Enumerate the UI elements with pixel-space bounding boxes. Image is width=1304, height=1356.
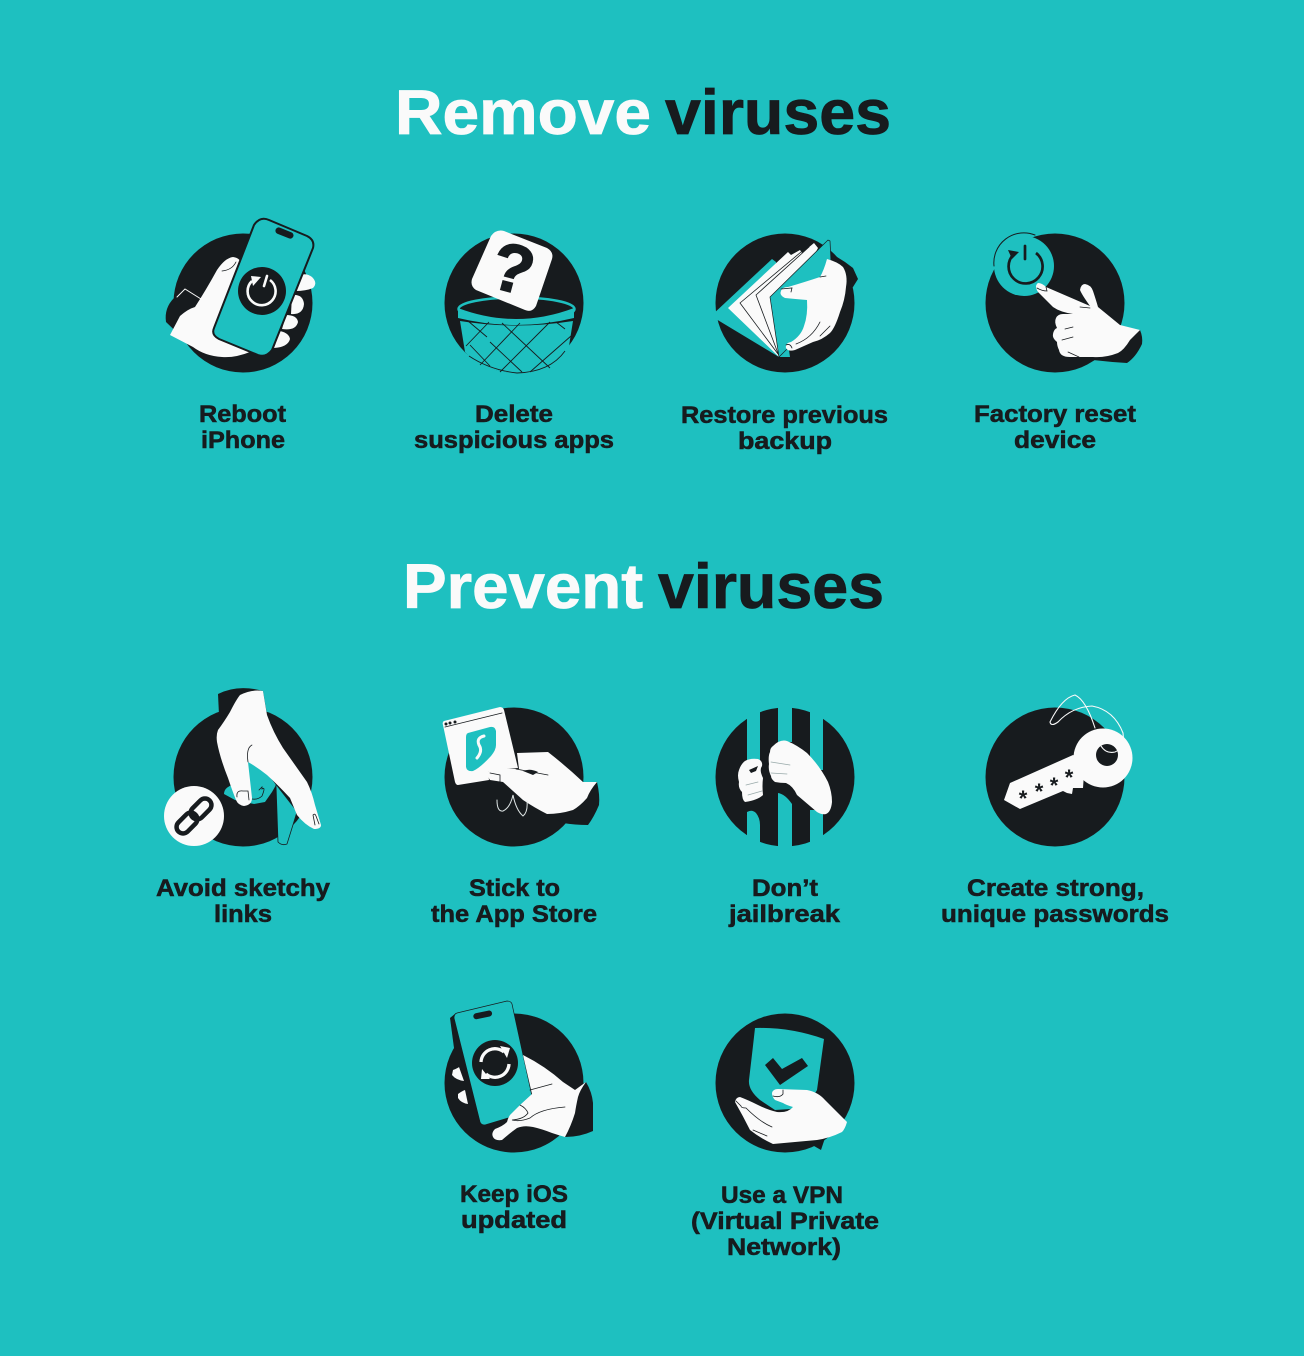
icon: question card dropping into basket: ? [483,227,543,311]
icon: hand holding App Store card [443,707,599,846]
label: Reboot iPhone: iPhone [201,427,285,454]
label: Reboot iPhone: Reboot [199,401,286,428]
panel: avoid sketchy links [156,688,331,928]
label: Avoid sketchy links: Avoid sketchy [156,875,331,902]
label: Factory reset device: device [1014,427,1096,454]
icon: key with hidden password [986,695,1132,846]
label: Keep iOS updated: updated [461,1207,567,1234]
label: Restore previous backup [681,402,888,455]
icon: key with hidden password: * [1019,786,1028,811]
panel: don't jailbreak [716,700,854,928]
label: Create strong, unique passwords: Create strong, [967,875,1144,902]
icon: hand holding phone with update arrows [444,1001,593,1152]
label: Create strong, unique passwords [941,875,1169,928]
label: Reboot iPhone [199,401,286,454]
label: Use a VPN (Virtual Private Network): Use a VPN [721,1182,843,1209]
label: Restore previous backup: backup [738,428,832,455]
label: Stick to the App Store: the App Store [431,901,597,928]
icon: key with hidden password: * [1050,773,1059,798]
label: Don't jailbreak [728,875,841,928]
heading: Remove viruses [395,78,891,148]
icon: hand holding VPN shield [716,1014,854,1152]
label: Delete suspicious apps: Delete [475,401,553,428]
heading: Remove viruses: Remove [395,78,651,148]
heading: Prevent viruses [403,552,884,622]
icon: fingers walking to a chain link [164,688,321,846]
label: Use a VPN (Virtual Private Network): (Virtual Private [691,1208,879,1235]
icon: hands gripping jail bars [716,700,854,853]
panel: create strong, unique passwords [941,695,1169,928]
icon: key with hidden password: * [1065,765,1074,790]
icon: key with hidden password: * [1035,779,1044,804]
label: Stick to the App Store: Stick to [469,875,560,902]
label: Delete suspicious apps: suspicious apps [414,427,614,454]
label: Restore previous backup: Restore previous [681,402,888,429]
panel: stick to the App Store [431,707,599,928]
label: Use a VPN (Virtual Private Network): Network) [727,1234,841,1261]
label: Avoid sketchy links [156,875,331,928]
label: Keep iOS updated [460,1181,568,1234]
label: Delete suspicious apps [414,401,614,454]
label: Don't jailbreak: jailbreak [728,901,841,928]
label: Use a VPN (Virtual Private Network) [691,1182,879,1261]
label: Factory reset device: Factory reset [974,401,1136,428]
label: Keep iOS updated: Keep iOS [460,1181,568,1208]
panel: keep iOS updated [444,1001,593,1234]
label: Don't jailbreak: Don’t [752,875,818,902]
label: Stick to the App Store [431,875,597,928]
heading: Prevent viruses: viruses [658,552,884,622]
panel: delete suspicious apps [414,227,614,454]
panel: restore previous backup [681,234,888,455]
label: Avoid sketchy links: links [214,901,272,928]
panel: reboot iPhone [166,219,315,454]
panel: factory reset device [974,233,1142,454]
icon: hand flipping through backup book [711,234,858,372]
label: Factory reset device [974,401,1136,454]
heading: Remove viruses: viruses [665,78,891,148]
heading: Prevent viruses: Prevent [403,552,643,622]
panel: use a VPN [691,1014,879,1261]
label: Create strong, unique passwords: unique passwords [941,901,1169,928]
icon: finger pressing power button [986,233,1142,372]
icon: question card dropping into basket [444,227,584,373]
icon: hand holding phone with power symbol [166,219,315,372]
